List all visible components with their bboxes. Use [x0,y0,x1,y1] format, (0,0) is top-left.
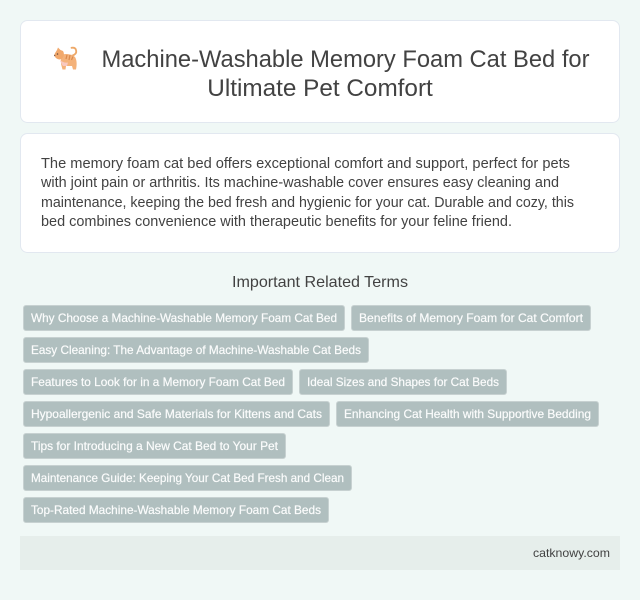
tag 4 [24,370,292,394]
tag 10 [24,498,328,522]
tag 1: Why Choose a Machine-Washable Memory Foam Cat Bed [31,311,337,325]
tag 5 [300,370,506,394]
footer: catknowy.com [533,546,610,560]
title [102,46,590,102]
text block: description [40,155,574,230]
panel: title card [20,20,620,122]
title: Machine-Washable Memory Foam Cat Bed for [102,46,590,73]
tag 7: Enhancing Cat Health with Supportive Bedding [344,407,591,421]
tag 1 [24,306,344,330]
tag 3 [24,338,368,362]
tag 8 [24,434,286,458]
tag 6: Hypoallergenic and Safe Materials for Kittens and Cats [31,407,322,421]
panel: related term tags [24,306,598,522]
footer [20,536,620,570]
text block: description: maintenance, keeping the bed fresh and hygienic for your cat. Durable and cozy, this [41,194,574,211]
tag 4: Features to Look for in a Memory Foam Cat Bed [31,375,285,389]
tag 2: Benefits of Memory Foam for Cat Comfort [359,311,584,325]
tag 6 [24,402,330,426]
panel: description [20,134,620,252]
tag 3: Easy Cleaning: The Advantage of Machine-Washable Cat Beds [31,343,361,357]
tag 5: Ideal Sizes and Shapes for Cat Beds [307,375,499,389]
icon: cat [54,48,77,70]
tag 9 [24,466,352,490]
text block: description: with joint pain or arthritis. Its machine-washable cover ensures easy cleaning and [40,174,559,191]
title: Ultimate Pet Comfort [207,75,433,102]
text block: description: The memory foam cat bed offers exceptional comfort and support, perfect for pets [41,155,570,172]
tag 8: Tips for Introducing a New Cat Bed to Your Pet [31,439,279,453]
tag 2 [352,306,590,330]
tag 9: Maintenance Guide: Keeping Your Cat Bed Fresh and Clean [31,471,344,485]
tag 10: Top-Rated Machine-Washable Memory Foam Cat Beds [31,503,321,517]
heading: related terms: Important Related Terms [232,274,408,291]
tag 7 [336,402,598,426]
text block: description: bed combines convenience with therapeutic benefits for your feline friend. [41,213,512,230]
